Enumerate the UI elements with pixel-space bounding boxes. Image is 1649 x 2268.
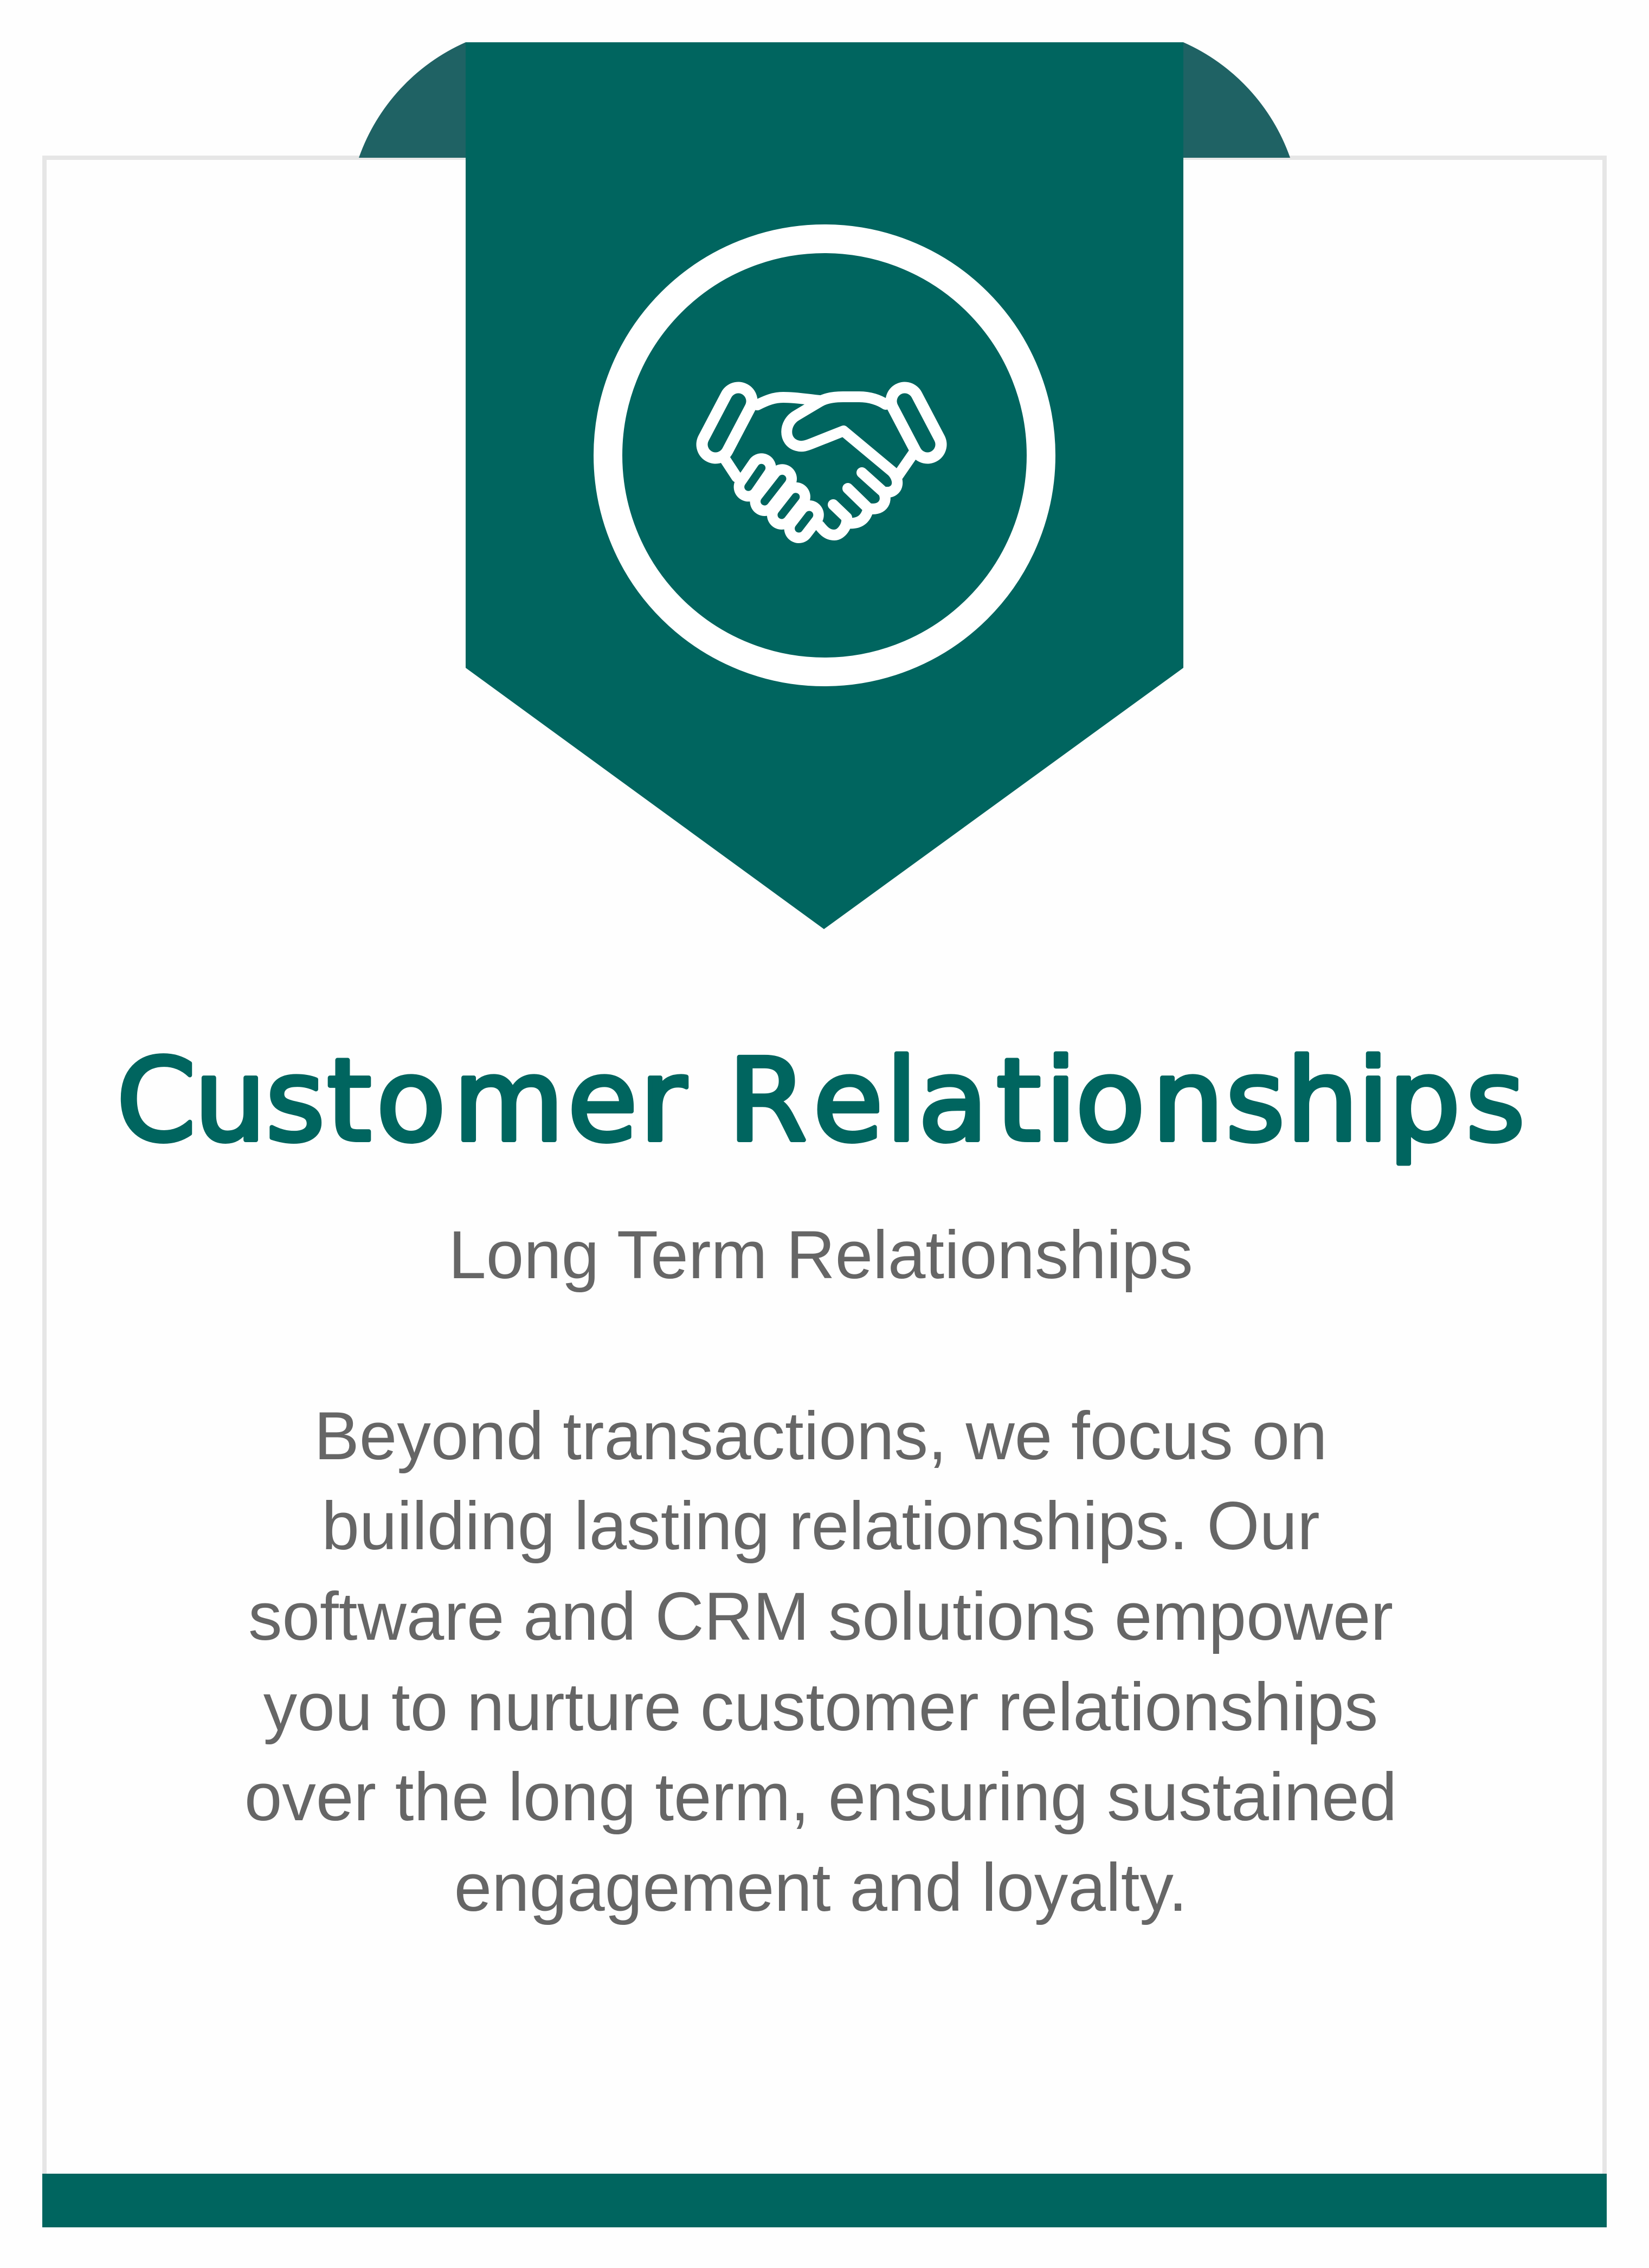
icon: handshake [716,397,927,535]
body text: building lasting relationships. Our [321,1489,1320,1564]
title: Customer Relationships [117,1034,1525,1167]
ribbon banner [466,42,1183,929]
bottom accent bar [42,2174,1607,2227]
body text: Beyond transactions, we focus on [314,1399,1328,1474]
body text [244,1399,1397,1925]
body text: software and CRM solutions empower [248,1579,1393,1654]
dome behind ribbon [359,42,1290,158]
body text: engagement and loyalty. [454,1850,1187,1925]
icon ring [608,239,1041,672]
body text: you to nurture customer relationships [263,1670,1378,1745]
body text: over the long term, ensuring sustained [244,1760,1397,1835]
subtitle: Long Term Relationships [448,1217,1193,1293]
